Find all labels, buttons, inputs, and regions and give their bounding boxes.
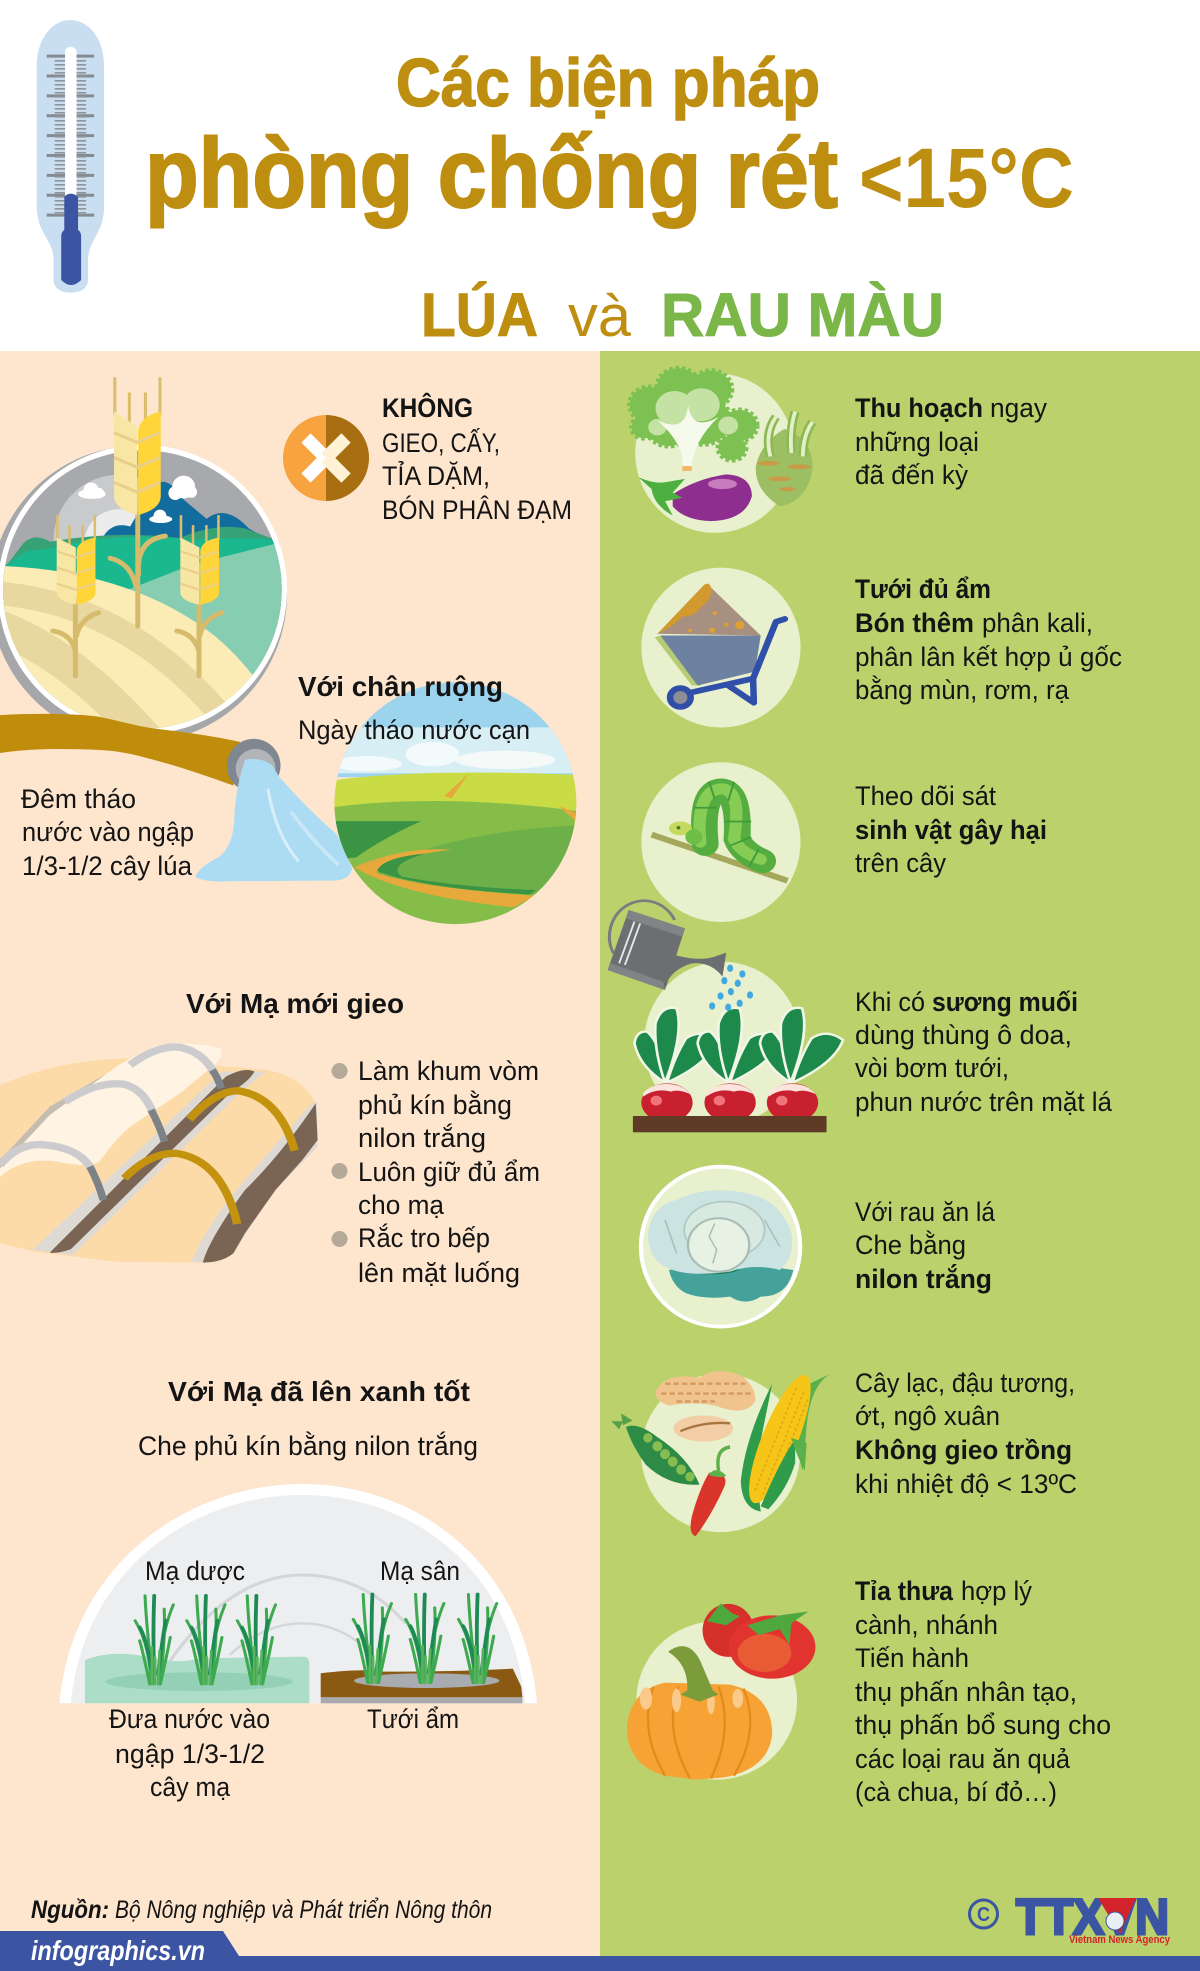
text: leafy vegetables <box>855 1197 996 1294</box>
text: thinning and pollination: các loại rau ăn quả <box>855 1744 1071 1774</box>
text: do not sow list: GIEO, CẤY, <box>382 427 500 458</box>
bullet list: seedling care: Luôn giữ đủ ẩm <box>358 1157 540 1187</box>
illustration: nylon dome with rice seedlings <box>59 1484 537 1703</box>
text: monitor pests: Theo dõi sát <box>855 781 996 811</box>
bullet list: seedling care: phủ kín bằng <box>358 1089 512 1120</box>
icon: no-action cross <box>283 415 369 501</box>
text: night water: nước vào ngập <box>22 817 194 847</box>
text: for the field: Ngày tháo nước cạn <box>298 715 530 745</box>
heading: new seedlings: Với Mạ mới gieo <box>186 988 404 1019</box>
title line 1: Các biện pháp <box>396 45 820 121</box>
text: peanuts and corn <box>855 1368 1077 1499</box>
illustration: seedbed tunnels <box>0 1044 318 1263</box>
text: harvest <box>855 393 1047 490</box>
text: for the field <box>298 671 530 745</box>
text: thinning and pollination: hợp lý <box>961 1576 1032 1606</box>
bullet list: seedling care: nilon trắng <box>358 1122 486 1153</box>
text: frost: sương muối <box>932 987 1078 1017</box>
text: thinning and pollination: (cà chua, bí đỏ…) <box>855 1777 1057 1807</box>
bullet list: seedling care: lên mặt luống <box>358 1258 520 1288</box>
text: do not sow list <box>382 392 572 525</box>
labels: seedling types: cây mạ <box>150 1772 231 1802</box>
text: thinning and pollination: thụ phấn bổ sung cho <box>855 1710 1111 1740</box>
title line 2: phòng chống rét <box>145 118 838 228</box>
labels: seedling types: Mạ dược <box>145 1556 245 1586</box>
text: cover with nylon: Che phủ kín bằng nilon trắng <box>138 1430 478 1461</box>
text: monitor pests: trên cây <box>855 848 946 878</box>
logo: TTXVN: Vietnam News Agency <box>1069 1934 1171 1946</box>
text: peanuts and corn: Không gieo trồng <box>855 1435 1072 1465</box>
text: thinning and pollination <box>855 1576 1111 1807</box>
text: do not sow list: KHÔNG <box>382 392 473 423</box>
labels: seedling types: Mạ sân <box>380 1556 460 1586</box>
subtitle: rice: LÚA <box>421 281 538 349</box>
text: for the field: Với chân ruộng <box>298 671 503 702</box>
text: peanuts and corn: khi nhiệt độ < 13ºC <box>855 1469 1077 1499</box>
labels: seedling types: Tưới ẩm <box>367 1704 459 1734</box>
footer bar <box>0 1931 1200 1971</box>
panel: right vegetable background <box>600 351 1200 1971</box>
bullet list: seedling care: Làm khum vòm <box>358 1056 539 1086</box>
text: water and fertilize: bằng mùn, rơm, rạ <box>855 674 1070 705</box>
logo: TTXVN: TTXVN <box>1016 1889 1169 1945</box>
source note: Bộ Nông nghiệp và Phát triển Nông thôn <box>115 1896 492 1924</box>
text: leafy vegetables: Với rau ăn lá <box>855 1197 996 1227</box>
text: monitor pests: sinh vật gây hại <box>855 815 1047 845</box>
subtitle: vegetables: RAU MÀU <box>661 281 944 349</box>
icon: radishes with watering can <box>608 901 843 1132</box>
icon: vegetables harvest <box>630 368 813 533</box>
text: leafy vegetables: Che bằng <box>855 1229 966 1260</box>
text: frost: phun nước trên mặt lá <box>855 1087 1113 1117</box>
text: peanuts and corn: Cây lạc, đậu tương, <box>855 1368 1075 1398</box>
text: frost: vòi bơm tưới, <box>855 1053 1009 1083</box>
text: harvest: những loại <box>855 427 979 457</box>
icon: pumpkin and tomatoes <box>627 1603 815 1780</box>
text: harvest: ngay <box>990 393 1047 423</box>
icon: cabbage under nylon <box>641 1167 800 1327</box>
source note: Nguồn: <box>31 1896 109 1924</box>
text: night water: Đêm tháo <box>21 784 136 814</box>
text: water and fertilize: phân kali, <box>982 608 1093 638</box>
title <box>145 45 1074 228</box>
icon: peanut peas chili corn <box>611 1368 830 1536</box>
text: monitor pests <box>855 781 1047 878</box>
text: thinning and pollination: cành, nhánh <box>855 1610 998 1640</box>
subtitle <box>421 281 944 349</box>
text: leafy vegetables: nilon trắng <box>855 1263 992 1294</box>
text: night water: 1/3-1/2 cây lúa <box>22 851 193 881</box>
logo: TTXVN: C <box>977 1904 990 1926</box>
illustration: rice field in magnifier with pipe and field <box>0 377 582 934</box>
text: thinning and pollination: Tiến hành <box>855 1643 969 1673</box>
text: harvest: Thu hoạch <box>855 393 983 423</box>
icon: thermometer <box>37 20 104 293</box>
text: water and fertilize <box>855 574 1122 705</box>
text: water and fertilize: phân lân kết hợp ủ gốc <box>855 642 1122 672</box>
text: water and fertilize: Bón thêm <box>855 608 974 638</box>
text: do not sow list: TỈA DẶM, <box>382 459 490 491</box>
labels: seedling types <box>109 1556 460 1802</box>
labels: seedling types: Đưa nước vào <box>109 1704 270 1734</box>
text: thinning and pollination: thụ phấn nhân tạo, <box>855 1677 1077 1707</box>
text: night water <box>21 784 194 881</box>
bullet list: seedling care <box>332 1056 540 1288</box>
bullet list: seedling care: Rắc tro bếp <box>358 1222 490 1253</box>
icon: caterpillar <box>641 762 801 922</box>
icon: wheelbarrow <box>641 568 801 727</box>
labels: seedling types: ngập 1/3-1/2 <box>115 1739 265 1769</box>
text: water and fertilize: Tưới đủ ẩm <box>855 574 991 604</box>
text: do not sow list: BÓN PHÂN ĐẠM <box>382 494 572 525</box>
subtitle: and: và <box>568 284 632 349</box>
panel: left rice background <box>0 351 600 1971</box>
bullet list: seedling care: cho mạ <box>358 1190 445 1220</box>
title temperature: <15°C <box>859 131 1074 225</box>
heading: green seedlings: Với Mạ đã lên xanh tốt <box>168 1376 470 1407</box>
text: peanuts and corn: ớt, ngô xuân <box>855 1401 1000 1431</box>
text: harvest: đã đến kỳ <box>855 460 968 490</box>
text: frost: dùng thùng ô doa, <box>855 1020 1072 1050</box>
text: frost: Khi có <box>855 987 925 1017</box>
footer site name: infographics.vn <box>31 1935 205 1966</box>
text: frost <box>855 987 1113 1117</box>
text: thinning and pollination: Tỉa thưa <box>855 1576 954 1606</box>
